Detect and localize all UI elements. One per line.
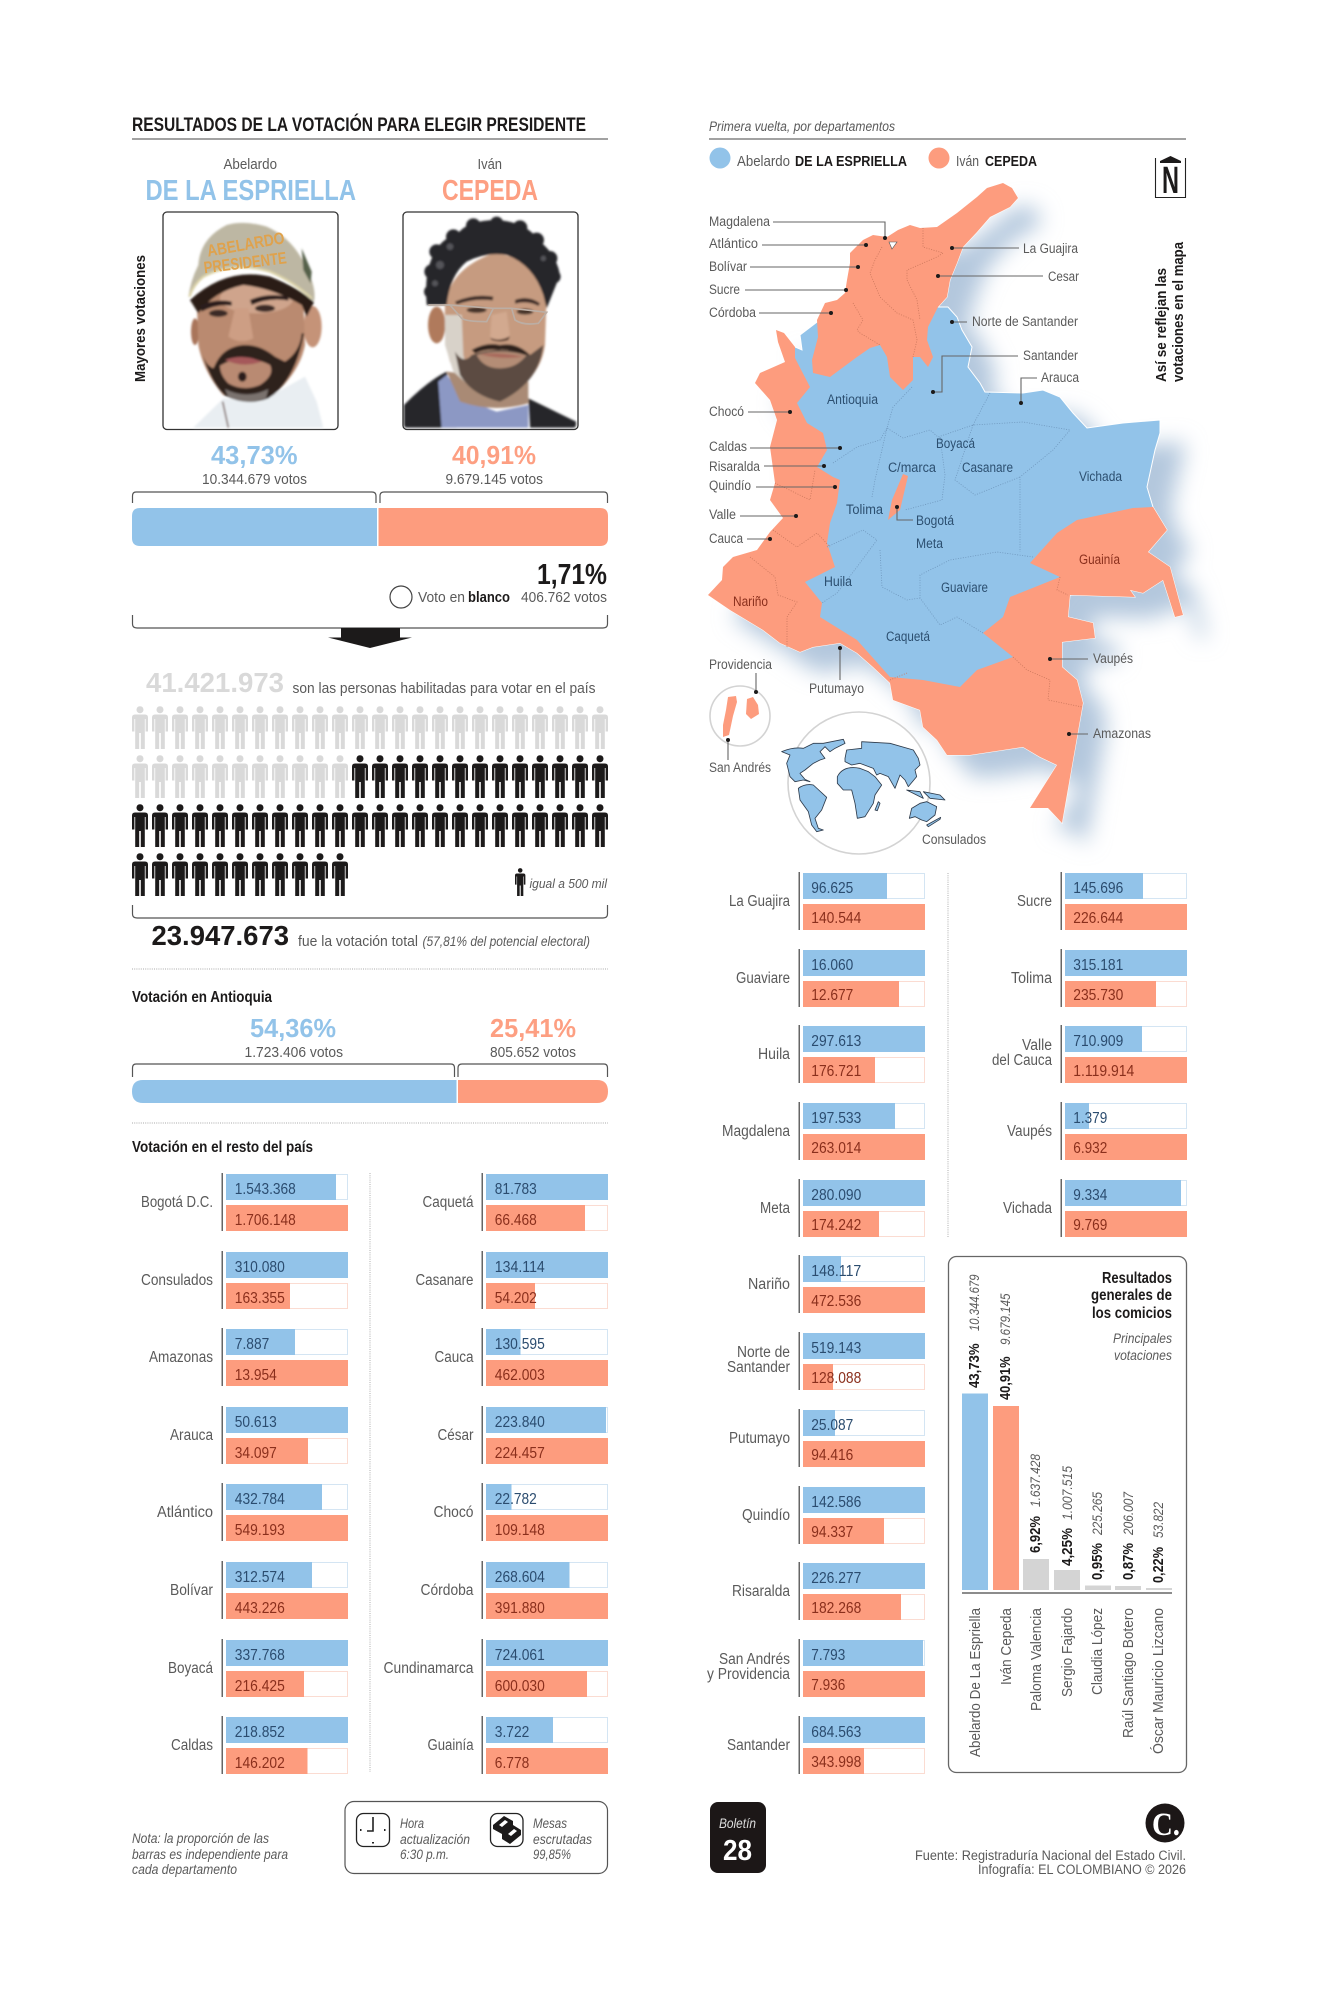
department bars: Arauca: 34.097 (235, 1445, 277, 1462)
blank vote (390, 559, 607, 608)
map labels with leaders: west: Sucre (709, 282, 740, 297)
icon: north (1156, 156, 1186, 202)
map labels with leaders: east: La Guajira (1023, 241, 1078, 256)
department bars: San Andrés y Providencia: y Providencia (707, 1666, 790, 1683)
department bars: Bogotá D.C.: 1.543.368 (235, 1181, 296, 1198)
vertical bar chart: Raúl Santiago Botero (1120, 1608, 1137, 1738)
vertical bar chart: Abelardo De La Espriella (967, 1607, 984, 1757)
source: Infografía: EL COLOMBIANO © 2026 (978, 1862, 1186, 1877)
map: Colombia (708, 183, 1207, 845)
total votes (132, 905, 608, 951)
department bars: Boyacá: 216.425 (235, 1678, 285, 1695)
boletín badge: Boletín (719, 1815, 756, 1831)
candidate name: Cepeda: CEPEDA (442, 175, 538, 207)
department bars: San Andrés y Providencia: San Andrés (719, 1651, 790, 1668)
map header: Primera vuelta, por departamentos (709, 119, 895, 134)
department bars: Risaralda: 226.277 (811, 1570, 861, 1587)
department bars: San Andrés y Providencia: 7.793 (811, 1647, 845, 1664)
department bars: Norte de Santander (727, 1332, 925, 1390)
rest of country heading: Votación en el resto del país (132, 1139, 313, 1156)
vertical bar chart: 1.007.515 (1060, 1466, 1075, 1520)
department bars: Nariño: 148.117 (811, 1263, 861, 1280)
blank vote: 406.762 votos (521, 590, 607, 606)
vertical bar chart: 10.344.679 (967, 1274, 982, 1331)
department bars: Tolima: 315.181 (1073, 957, 1123, 974)
department bars: Córdoba: 391.880 (495, 1600, 545, 1617)
department bars: Quindío: 94.337 (811, 1524, 853, 1541)
note (132, 1831, 288, 1877)
department bars: Bolívar: 312.574 (235, 1569, 285, 1586)
department bars: Vichada: Vichada (1003, 1200, 1052, 1217)
note: cada departamento (132, 1862, 237, 1877)
department bars: Caldas: Caldas (171, 1737, 213, 1754)
department bars: Cundinamarca: 600.030 (495, 1678, 545, 1695)
info box: hora y mesas (345, 1802, 608, 1874)
vertical bar chart: Paloma Valencia (1028, 1607, 1045, 1711)
vertical note (1153, 241, 1187, 382)
map labels inside territory: Meta (916, 536, 943, 551)
department bars: Caquetá (422, 1173, 608, 1231)
department bars: Santander: 684.563 (811, 1724, 861, 1741)
panel heading: los comicios (1092, 1305, 1172, 1322)
department bars: Consulados: Consulados (141, 1272, 213, 1289)
department bars: Meta: 280.090 (811, 1187, 861, 1204)
inset: San Andrés y Providencia: San Andrés (709, 760, 771, 775)
info box: hora y mesas: Mesas (533, 1816, 567, 1831)
department bars: Vaupés: 1.379 (1073, 1110, 1107, 1127)
department bars: Guaviare: 16.060 (811, 957, 853, 974)
Antioquia results (244, 1013, 576, 1061)
department bars: César: 223.840 (495, 1414, 545, 1431)
department bars: Nariño (748, 1255, 925, 1313)
department bars: Guaviare: Guaviare (736, 970, 790, 987)
department bars: Santander: Santander (727, 1737, 790, 1754)
department bars: Caldas (171, 1716, 348, 1774)
Antioquia results: 1.723.406 votos (244, 1045, 343, 1061)
photo: Abelardo de la Espriella (163, 212, 338, 430)
department bars: Atlántico: Atlántico (157, 1504, 213, 1521)
department bars: San Andrés y Providencia (707, 1639, 925, 1697)
vertical bar chart: 6,92% (1027, 1516, 1044, 1553)
pictogram: voters (132, 706, 608, 896)
panel: resultados generales (948, 1256, 1186, 1772)
department bars: Arauca (170, 1406, 348, 1464)
department bars: Magdalena: 263.014 (811, 1140, 861, 1157)
Antioquia heading: Votación en Antioquia (132, 989, 272, 1006)
department bars: Vaupés: Vaupés (1007, 1123, 1052, 1140)
blank vote: Voto en (418, 590, 465, 606)
department bars: Atlántico (157, 1483, 348, 1541)
vertical bar chart: 0,22% (1150, 1547, 1167, 1583)
eligible voters (146, 667, 596, 698)
Antioquia results: 25,41% (490, 1013, 576, 1043)
department bars: Quindío: Quindío (742, 1507, 790, 1524)
department bars: Putumayo: 94.416 (811, 1447, 853, 1464)
map labels with leaders: east: Putumayo (809, 681, 864, 696)
department bars: Cauca (434, 1328, 608, 1386)
map labels with leaders: east: Vaupés (1093, 651, 1133, 666)
department bars: Huila: 176.721 (811, 1063, 861, 1080)
vertical bar chart: Claudia López (1089, 1608, 1106, 1695)
result: Cepeda 40,91% (446, 440, 543, 488)
department bars: Vichada: 9.769 (1073, 1217, 1107, 1234)
department bars: La Guajira: 96.625 (811, 880, 853, 897)
eligible voters: son las personas habilitadas para votar en el país (292, 681, 596, 697)
vertical bar chart: Sergio Fajardo (1059, 1608, 1076, 1697)
vertical bar chart: 0,87% (1120, 1543, 1137, 1580)
department bars: Quindío: 142.586 (811, 1494, 861, 1511)
bracket and arrow (132, 615, 608, 648)
map labels with leaders: east: Cesar (1048, 269, 1079, 284)
info box: hora y mesas: 6:30 p.m. (400, 1847, 449, 1862)
map shadow (732, 205, 1207, 845)
department bars: Consulados: 163.355 (235, 1290, 285, 1307)
department bars: Meta (760, 1179, 925, 1237)
department bars: Valle del Cauca (992, 1025, 1187, 1083)
department bars: Sucre (1017, 872, 1187, 930)
map orange west, south and east (708, 330, 1183, 823)
photo: Abelardo de la Espriella: ABELARDO (206, 228, 286, 261)
map labels with leaders: west: Chocó (709, 404, 744, 419)
department bars: Risaralda (732, 1562, 925, 1620)
department bars: Atlántico: 432.784 (235, 1491, 285, 1508)
department bars: Guainía: 6.778 (495, 1755, 529, 1772)
department bars: Bolívar: Bolívar (170, 1582, 213, 1599)
boletín badge: 28 (723, 1835, 752, 1867)
map labels inside territory: Guainía (1079, 552, 1120, 567)
vertical bar chart: 4,25% (1059, 1528, 1076, 1566)
department bars: Vichada: 9.334 (1073, 1187, 1107, 1204)
info box: hora y mesas: actualización (400, 1832, 470, 1847)
title: RESULTADOS DE LA VOTACIÓN PARA ELEGIR PRESIDENTE (132, 112, 586, 136)
department bars: Caquetá: Caquetá (422, 1194, 474, 1211)
inset: world map consulates: Consulados (922, 832, 986, 847)
department bars: Valle del Cauca: del Cauca (992, 1052, 1052, 1069)
inset: San Andrés y Providencia: Providencia (709, 657, 772, 672)
map legend (710, 148, 1037, 170)
blank vote: 1,71% (537, 559, 607, 591)
total votes: (57,81% del potencial electoral) (422, 934, 590, 949)
map labels inside territory: Antioquia (827, 392, 878, 407)
total votes: fue la votación total (298, 934, 418, 950)
eligible voters: 41.421.973 (146, 667, 284, 698)
Antioquia results: 54,36% (250, 1013, 336, 1043)
department bars: Vichada (1003, 1179, 1187, 1237)
map labels with leaders: west: Córdoba (709, 305, 756, 320)
map labels inside territory: Nariño (733, 594, 768, 609)
department bars: Caquetá: 66.468 (495, 1212, 537, 1229)
department bars: Amazonas: 13.954 (235, 1367, 277, 1384)
vertical bar chart: Iván Cepeda (998, 1607, 1015, 1685)
department bars: Boyacá: Boyacá (168, 1660, 213, 1677)
department bars: Sucre: 226.644 (1073, 910, 1123, 927)
department bars: Meta: 174.242 (811, 1217, 861, 1234)
department bars: Valle del Cauca: 1.119.914 (1073, 1063, 1134, 1080)
result: De la Espriella 43,73% (202, 440, 307, 488)
department bars: Amazonas (149, 1328, 348, 1386)
national stacked bar (132, 492, 608, 546)
department bars: Nariño: Nariño (748, 1276, 790, 1293)
result: Cepeda 40,91%: 9.679.145 votos (446, 472, 543, 488)
candidate name: De la Espriella (146, 157, 356, 207)
department bars: Bogotá D.C.: 1.706.148 (235, 1212, 296, 1229)
department bars: Tolima: 235.730 (1073, 987, 1123, 1004)
department bars: Cundinamarca: Cundinamarca (384, 1660, 474, 1677)
department bars: Nariño: 472.536 (811, 1293, 861, 1310)
department bars: Cauca: 462.003 (495, 1367, 545, 1384)
pictogram legend (515, 868, 608, 896)
map labels inside territory: Caquetá (886, 629, 930, 644)
department bars: Valle del Cauca: 710.909 (1073, 1033, 1123, 1050)
vertical bar chart: 0,95% (1089, 1543, 1106, 1580)
vertical bar chart: 43,73% (966, 1344, 983, 1388)
department bars: Sucre: 145.696 (1073, 880, 1123, 897)
map labels with leaders: west: Atlántico (709, 236, 758, 251)
panel heading: Resultados (1102, 1270, 1172, 1287)
map orange north (812, 183, 1018, 390)
department bars: Amazonas: 7.887 (235, 1336, 269, 1353)
department bars: Casanare: 134.114 (495, 1259, 545, 1276)
map labels inside territory: Casanare (962, 460, 1013, 475)
map labels with leaders: west: Caldas (709, 439, 747, 454)
department bars: Tolima: Tolima (1011, 970, 1052, 987)
department bars: Huila: Huila (758, 1046, 790, 1063)
department bars: Vaupés: 6.932 (1073, 1140, 1107, 1157)
Antioquia bar (132, 1064, 608, 1103)
department bars: Guaviare (736, 949, 925, 1007)
department bars: La Guajira: 140.544 (811, 910, 861, 927)
map labels with leaders: west: Valle (709, 507, 736, 522)
department bars: Bogotá D.C. (141, 1173, 348, 1231)
department bars: Boyacá: 337.768 (235, 1647, 285, 1664)
inset: San Andrés y Providencia (709, 657, 772, 775)
vertical bar chart: 9.679.145 (998, 1293, 1013, 1345)
result: De la Espriella 43,73%: 10.344.679 votos (202, 472, 307, 488)
department bars: César: César (438, 1427, 474, 1444)
logo: C. (1152, 1807, 1180, 1843)
department bars: Guaviare: 12.677 (811, 987, 853, 1004)
department bars: Arauca: Arauca (170, 1427, 213, 1444)
info box: hora y mesas: escrutadas (533, 1832, 592, 1847)
department bars: Bogotá D.C.: Bogotá D.C. (141, 1194, 213, 1211)
vertical bar chart: 1.637.428 (1028, 1454, 1043, 1507)
info box: hora y mesas: 99,85% (533, 1847, 571, 1862)
panel heading (1091, 1270, 1172, 1363)
map labels with leaders: west (709, 214, 887, 546)
vertical bar chart: 40,91% (997, 1356, 1014, 1400)
department bars: San Andrés y Providencia: 7.936 (811, 1677, 845, 1694)
vertical bar chart: 53.822 (1151, 1502, 1166, 1538)
department bars: Guainía: Guainía (428, 1737, 474, 1754)
candidate name: De la Espriella: Abelardo (224, 157, 277, 173)
map legend: Iván (956, 153, 979, 170)
vertical label: mayores votaciones: Mayores votaciones (132, 255, 149, 382)
note: barras es independiente para (132, 1847, 288, 1862)
icon: north: N (1162, 160, 1179, 202)
source: Fuente: Registraduría Nacional del Estado Civil. (915, 1848, 1186, 1863)
department bars: Casanare: 54.202 (495, 1290, 537, 1307)
department bars: Cauca: Cauca (434, 1349, 474, 1366)
map labels with leaders: east: Norte de Santander (972, 314, 1078, 329)
department bars: Consulados: 310.080 (235, 1259, 285, 1276)
map labels with leaders: west: Bolívar (709, 259, 747, 274)
icon: clock (356, 1814, 390, 1846)
department bars: Caldas: 218.852 (235, 1724, 285, 1741)
department bars: Cauca: 130.595 (495, 1336, 545, 1353)
department bars: Putumayo: 25.087 (811, 1417, 853, 1434)
department bars: César: 224.457 (495, 1445, 545, 1462)
map labels with leaders: west: Cauca (709, 531, 743, 546)
map labels inside territory (733, 392, 1122, 644)
panel heading: generales de (1091, 1287, 1172, 1304)
department bars: Santander: 343.998 (811, 1754, 861, 1771)
department bars: Norte de Santander: Santander (727, 1359, 790, 1376)
inset: world map consulates (782, 712, 986, 854)
department bars: Guainía: 3.722 (495, 1724, 529, 1741)
department bars: Magdalena: 197.533 (811, 1110, 861, 1127)
department bars: Sucre: Sucre (1017, 893, 1052, 910)
department bars: Putumayo (729, 1409, 925, 1467)
department bars: Chocó: 109.148 (495, 1522, 545, 1539)
panel heading: votaciones (1114, 1348, 1172, 1363)
department bars: Bolívar (170, 1561, 348, 1619)
candidate name: Cepeda: Iván (478, 157, 502, 173)
map blue territory (708, 183, 1183, 823)
department bars: Consulados (141, 1251, 348, 1309)
department bars: Amazonas: Amazonas (149, 1349, 213, 1366)
vertical bar chart: 206.007 (1121, 1492, 1136, 1536)
department bars: Risaralda: 182.268 (811, 1600, 861, 1617)
map labels inside territory: Bogotá (916, 513, 954, 528)
map labels inside territory: Huila (824, 574, 852, 589)
department bars: Chocó: Chocó (434, 1504, 474, 1521)
panel heading: Principales (1113, 1331, 1172, 1346)
boletín badge (710, 1802, 766, 1873)
map legend: Abelardo (737, 153, 790, 170)
department bars: Chocó (434, 1483, 608, 1541)
map labels with leaders: east: Santander (1023, 348, 1078, 363)
department bars: Putumayo: Putumayo (729, 1430, 790, 1447)
department bars: César (438, 1406, 608, 1464)
department bars: Atlántico: 549.193 (235, 1522, 285, 1539)
Antioquia results: 805.652 votos (490, 1045, 576, 1061)
candidate name: Cepeda (442, 157, 538, 207)
department bars: Quindío (742, 1486, 925, 1544)
result: De la Espriella 43,73%: 43,73% (211, 440, 298, 470)
department bars: Magdalena (722, 1102, 925, 1160)
department bars: Cundinamarca: 724.061 (495, 1647, 545, 1664)
photo: Abelardo de la Espriella: PRESIDENTE (203, 248, 288, 277)
department bars: Tolima (1011, 949, 1187, 1007)
department bars: Boyacá (168, 1639, 348, 1697)
map legend: DE LA ESPRIELLA (795, 153, 907, 170)
map labels inside territory: Tolima (846, 502, 883, 517)
map labels inside territory: Guaviare (941, 580, 988, 595)
department bars: Caldas: 146.202 (235, 1755, 285, 1772)
department bars: Córdoba: 268.604 (495, 1569, 545, 1586)
department bars: Caquetá: 81.783 (495, 1181, 537, 1198)
department bars: Norte de Santander: 519.143 (811, 1340, 861, 1357)
map Bogotá strip (888, 474, 908, 520)
department bars: La Guajira: La Guajira (729, 893, 790, 910)
department bars: Santander (727, 1716, 925, 1774)
map labels inside territory: Vichada (1079, 469, 1122, 484)
department bars: Cundinamarca (384, 1639, 608, 1697)
department bars: Bolívar: 443.226 (235, 1600, 285, 1617)
department bars: Chocó: 22.782 (495, 1491, 537, 1508)
department bars: Casanare (416, 1251, 608, 1309)
map labels with leaders: east: Arauca (1041, 370, 1079, 385)
department bars: Vaupés (1007, 1102, 1187, 1160)
map labels inside territory: Boyacá (936, 436, 975, 451)
vertical bar chart: 225.265 (1090, 1492, 1105, 1536)
map labels with leaders: east: Amazonas (1093, 726, 1151, 741)
vertical bar chart (962, 1274, 1172, 1757)
map labels with leaders: west: Magdalena (709, 214, 770, 229)
info box: hora y mesas: Hora (400, 1816, 424, 1831)
department bars: Arauca: 50.613 (235, 1414, 277, 1431)
department bars: Risaralda: Risaralda (732, 1583, 790, 1600)
vertical note: votaciones en el mapa (1170, 241, 1187, 382)
department bars: Casanare: Casanare (416, 1272, 474, 1289)
department bars: Huila (758, 1025, 925, 1083)
map legend: CEPEDA (985, 153, 1037, 170)
pictogram legend: igual a 500 mil (530, 876, 608, 891)
department bars: Valle del Cauca: Valle (1022, 1037, 1052, 1054)
map labels with leaders: west: Quindío (709, 478, 751, 493)
map labels with leaders: west: Risaralda (709, 459, 760, 474)
department bars: Meta: Meta (760, 1200, 790, 1217)
candidate name: De la Espriella: DE LA ESPRIELLA (146, 175, 356, 207)
department bars: Córdoba (420, 1561, 608, 1619)
blank vote: blanco (468, 590, 510, 606)
department bars: Norte de Santander: 128.088 (811, 1370, 861, 1387)
department bars: Huila: 297.613 (811, 1033, 861, 1050)
icon: mesas (490, 1814, 523, 1846)
map labels inside territory: C/marca (888, 460, 936, 475)
department bars: Norte de Santander: Norte de (737, 1344, 790, 1361)
source (915, 1848, 1186, 1877)
map labels with leaders: east (809, 241, 1151, 741)
total votes: 23.947.673 (152, 920, 289, 951)
vertical note: Así se reflejan las (1153, 268, 1170, 382)
vertical bar chart: Óscar Mauricio Lizcano (1150, 1608, 1167, 1754)
department bars: Magdalena: Magdalena (722, 1123, 790, 1140)
department bars: Córdoba: Córdoba (420, 1582, 474, 1599)
department bars: Guainía (428, 1716, 608, 1774)
note: Nota: la proporción de las (132, 1831, 269, 1846)
result: Cepeda 40,91%: 40,91% (452, 440, 536, 470)
photo: Iván Cepeda (403, 212, 578, 430)
department bars: La Guajira (729, 872, 925, 930)
